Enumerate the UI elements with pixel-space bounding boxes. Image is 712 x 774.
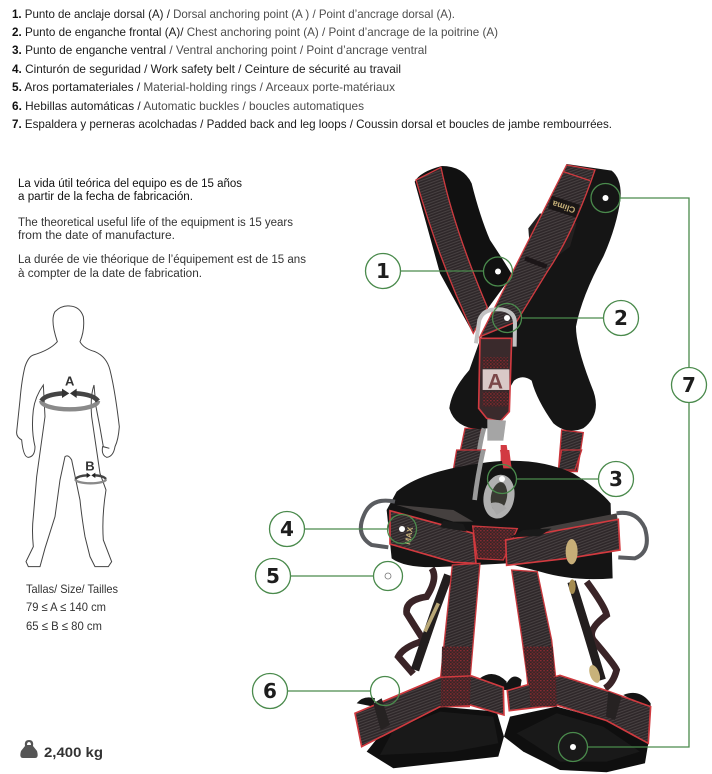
lifespan note: à compter de la date de fabrication. <box>18 268 202 280</box>
feature list: 6. Hebillas automáticas / Automatic buckles / boucles automatiques <box>12 99 364 113</box>
leg strap overlap <box>441 677 557 707</box>
weight <box>20 740 103 760</box>
lifespan note: a partir de la fecha de fabricación. <box>18 191 193 203</box>
feature list: 5. Aros portamateriales / Material-holding rings / Arceaux porte-matériaux <box>12 80 395 94</box>
callout 7 <box>558 184 706 762</box>
label A: A <box>65 373 75 388</box>
weight value: 2,400 kg <box>44 745 103 760</box>
body measurement figure <box>17 306 119 567</box>
sizes: 65 ≤ B ≤ 80 cm <box>26 619 102 633</box>
lifespan note: La durée de vie théorique de l’équipement est de 15 ans <box>18 254 306 266</box>
callout 3: 3 <box>609 467 623 491</box>
lower buckle <box>487 419 506 441</box>
feature list: 2. Punto de enganche frontal (A)/ Chest anchoring point (A) / Point d’ancrage de la poitrine (A) <box>12 25 498 39</box>
icon: kettlebell weight <box>20 740 38 758</box>
body outline <box>17 306 119 567</box>
ventral ring <box>484 477 514 517</box>
sizes: 79 ≤ A ≤ 140 cm <box>26 600 106 614</box>
feature list <box>12 7 612 131</box>
belt tag: MAX <box>403 526 415 545</box>
lower upper straps <box>456 428 482 472</box>
callout 4: 4 <box>280 517 294 541</box>
left gear ring <box>361 501 395 547</box>
sizes <box>26 582 118 633</box>
strap label <box>548 196 580 218</box>
callout 2 <box>492 300 638 336</box>
right shoulder strap <box>480 165 595 337</box>
ring A <box>41 389 98 409</box>
red gate lower <box>500 450 512 468</box>
lifespan note: The theoretical useful life of the equipment is 15 years <box>18 217 293 229</box>
left shoulder pad <box>415 166 512 334</box>
right gear ring <box>617 513 647 558</box>
harness: lower part <box>355 450 651 772</box>
D-ring <box>476 309 515 347</box>
belt left <box>390 511 476 563</box>
leg pad right <box>504 707 648 772</box>
center strap <box>479 338 512 422</box>
leg pad left <box>367 707 504 768</box>
red gate <box>501 445 511 472</box>
callout 5 <box>256 558 402 594</box>
callout 5: 5 <box>266 564 280 588</box>
waist pad <box>387 461 613 579</box>
lifespan note: La vida útil teórica del equipo es de 15 años <box>18 178 242 190</box>
carabiner upper <box>477 428 484 472</box>
right thin strap <box>569 579 617 688</box>
harness: upper part <box>415 164 621 472</box>
carabiner lower <box>475 450 483 500</box>
callout 2: 2 <box>614 306 628 330</box>
leg loop right <box>507 675 651 743</box>
callout 6: 6 <box>263 679 277 703</box>
left shoulder strap <box>416 167 487 333</box>
back pad <box>449 164 621 431</box>
feature list: 4. Cinturón de seguridad / Work safety belt / Ceinture de sécurité au travail <box>12 62 401 76</box>
A patch <box>483 369 509 390</box>
leg tags <box>373 692 622 730</box>
callout 7: 7 <box>682 373 696 397</box>
label B: B <box>85 458 95 473</box>
lifespan note: from the date of manufacture. <box>18 230 175 242</box>
belt centre <box>473 526 517 560</box>
callout 6 <box>252 674 400 708</box>
ring B <box>75 473 106 483</box>
callouts <box>252 184 706 762</box>
buckle on right strap <box>528 213 577 257</box>
leg strap left <box>440 563 480 707</box>
feature list: 3. Punto de enganche ventral / Ventral anchoring point / Point d’ancrage ventral <box>12 43 427 57</box>
left thin strap <box>398 568 448 674</box>
leg strap right <box>512 570 557 707</box>
sizes: Tallas/ Size/ Tailles <box>26 582 118 596</box>
callout 3 <box>488 462 634 496</box>
feature list: 1. Punto de anclaje dorsal (A) / Dorsal anchoring point (A ) / Point d’ancrage dorsal (A). <box>12 7 455 21</box>
logo oval <box>566 539 578 564</box>
callout 4 <box>270 512 416 546</box>
feature list: 7. Espaldera y perneras acolchadas / Padded back and leg loops / Coussin dorsal et boucles de jambe rembourrées. <box>12 117 612 131</box>
belt buckles <box>440 521 552 537</box>
callout 1 <box>366 254 512 288</box>
lifespan note <box>18 178 306 280</box>
callout 1: 1 <box>376 259 390 283</box>
belt backing <box>397 505 618 533</box>
strap label: Clima <box>551 199 577 215</box>
harness: upper part: A <box>488 370 503 394</box>
belt right <box>506 519 620 565</box>
leg loop left <box>355 676 504 747</box>
upper strap continuation <box>453 450 485 470</box>
leg pad bumps <box>357 674 651 710</box>
